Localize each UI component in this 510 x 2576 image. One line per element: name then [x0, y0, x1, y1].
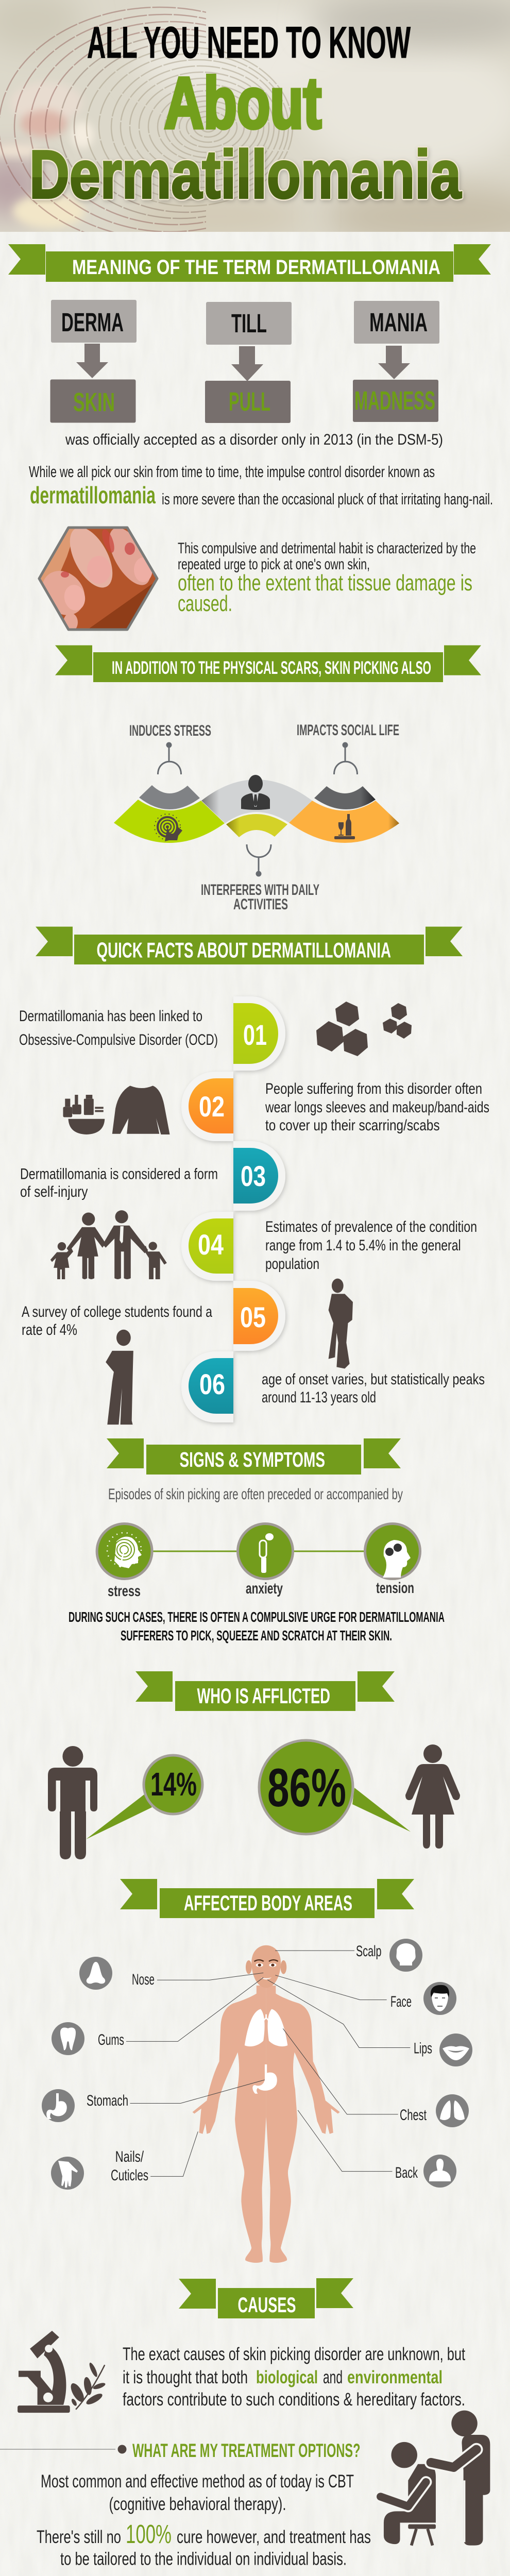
segment: social dark gray	[314, 786, 376, 809]
labels: body areas	[87, 1943, 432, 2184]
banner: who is afflicted: WHO IS AFFLICTED	[197, 1684, 330, 1708]
word root: derma to skin: SKIN	[73, 387, 115, 417]
icon: therapist and patient	[381, 2411, 490, 2546]
icon: male	[48, 1746, 97, 1859]
segment: stress gray	[139, 785, 200, 809]
callout: 86 percent: 86%	[267, 1758, 346, 1818]
icon: student with backpack	[329, 1279, 353, 1369]
icon: bust	[423, 2155, 456, 2188]
text: treatment options	[37, 2471, 371, 2569]
icon: stomach	[42, 2089, 75, 2122]
icon: face	[423, 1982, 456, 2015]
text: officially accepted: was officially accepted as a disorder only in 2013 (in the DSM-5)	[65, 431, 443, 448]
badge 04	[181, 1212, 233, 1281]
leader lines	[126, 1951, 410, 2176]
labels: body areas: Stomach	[87, 2092, 128, 2109]
icon: lips	[439, 2033, 472, 2066]
label: interferes with daily activities: ACTIVITIES	[233, 896, 288, 913]
connector: stress	[158, 743, 181, 774]
labels: body areas: Nose	[132, 1971, 155, 1988]
badge 01	[233, 996, 285, 1071]
fact 01: Dermatillomania has been linked to	[19, 1008, 202, 1025]
title line: about: About	[164, 62, 321, 143]
word root: mania to madness: MADNESS	[354, 386, 435, 415]
fact 03	[20, 1141, 285, 1211]
badge 01: 01	[243, 1019, 267, 1051]
labels: body areas: Scalp	[356, 1943, 381, 1960]
symptom: stress	[97, 1524, 152, 1579]
panel: gender split	[48, 1740, 460, 1859]
badge 05	[233, 1281, 285, 1351]
fact 04: population	[265, 1256, 319, 1273]
fact 01: Obsessive-Compulsive Disorder (OCD)	[19, 1031, 218, 1048]
fact 05: A survey of college students found a	[22, 1303, 212, 1320]
diagram: effects of skin picking	[114, 722, 399, 913]
panel: quick facts timeline	[19, 996, 489, 1425]
banner: affected body areas	[120, 1879, 414, 1918]
icon: female	[405, 1744, 460, 1849]
icon: scalp	[389, 1939, 422, 1972]
text: treatment options: Most common and effective method as of today is CBT	[41, 2471, 354, 2492]
word root: mania to madness	[353, 301, 439, 422]
banner: signs and symptoms: SIGNS & SYMPTOMS	[179, 1448, 325, 1471]
banner: quick facts	[36, 927, 463, 964]
word root: mania to madness: MANIA	[369, 308, 428, 337]
banner: causes: CAUSES	[238, 2293, 296, 2317]
text: treatment options: There's still no	[37, 2527, 121, 2547]
badge 03: 03	[241, 1160, 266, 1192]
word root: till to pull: TILL	[231, 309, 267, 338]
labels: body areas: Face	[390, 1993, 412, 2010]
label: stress: stress	[108, 1583, 141, 1600]
label: interferes with daily activities	[201, 882, 319, 913]
word root: till to pull	[205, 302, 292, 423]
connector: daily activities	[247, 844, 271, 876]
text: treatment options: 100%	[126, 2519, 172, 2549]
text: compulsive urge	[69, 1609, 445, 1643]
connector: social	[334, 743, 358, 774]
callout: 14 percent: 14%	[150, 1766, 197, 1803]
labels: body areas: Chest	[400, 2107, 427, 2124]
segment: stress green with head icon	[114, 800, 225, 843]
text: compulsive habit: repeated urge to pick at one's own skin,	[178, 556, 370, 573]
badge 06	[181, 1351, 233, 1422]
fact 05: rate of 4%	[22, 1321, 77, 1338]
banner: causes	[179, 2278, 353, 2318]
text: causes	[123, 2344, 465, 2410]
segment: social orange with bottle icon	[289, 801, 399, 843]
fact 03: Dermatillomania is considered a form	[20, 1165, 218, 1183]
icon: boy standing	[106, 1330, 133, 1425]
photo: picked fingers in hexagon	[38, 527, 159, 631]
fact 04	[50, 1210, 477, 1281]
labels: body areas: Nails/	[115, 2148, 144, 2165]
badge 02: 02	[199, 1090, 225, 1123]
banner: affected body areas: AFFECTED BODY AREAS	[184, 1891, 352, 1915]
fact 01	[19, 996, 412, 1071]
icon: makeup and sweater	[63, 1086, 170, 1134]
callout: 86 percent	[259, 1740, 411, 1834]
text: compulsive habit: caused.	[178, 591, 232, 616]
badge 03	[233, 1141, 285, 1211]
text: compulsive habit	[178, 540, 476, 616]
diagram: body figure	[126, 1945, 410, 2263]
icon: microscope and sprig	[18, 2331, 106, 2413]
badge 06: 06	[199, 1368, 225, 1400]
fact 05	[22, 1279, 353, 1369]
fact 02	[63, 1072, 489, 1141]
badge 05: 05	[240, 1301, 266, 1333]
icon: hand	[51, 2157, 84, 2190]
text: intro paragraph: dermatillomania	[30, 482, 156, 509]
label: impacts social life: IMPACTS SOCIAL LIFE	[297, 722, 399, 739]
badge 02	[181, 1072, 233, 1141]
panel: symptoms	[97, 1524, 420, 1600]
fact 03: of self-injury	[20, 1183, 88, 1200]
fingerprint	[0, 6, 293, 232]
symptom: anxiety	[238, 1524, 293, 1579]
banner: meaning of the term: MEANING OF THE TERM DERMATILLOMANIA	[72, 256, 440, 279]
banner: who is afflicted	[135, 1671, 395, 1711]
panel: word roots	[50, 300, 439, 423]
fact 06	[106, 1330, 485, 1425]
labels: body areas: Back	[395, 2164, 418, 2181]
text: treatment options: (cognitive behavioral therapy).	[109, 2494, 286, 2514]
fact 06: around 11-13 years old	[262, 1389, 376, 1406]
labels: body areas: Gums	[98, 2031, 124, 2048]
label: induces stress: INDUCES STRESS	[129, 722, 211, 739]
icon: nose	[79, 1957, 112, 1990]
text: causes: it is thought that both	[123, 2367, 248, 2387]
callout: 14 percent	[86, 1755, 202, 1839]
labels: body areas: Lips	[414, 2040, 432, 2057]
banner: in addition to the physical scars	[55, 645, 481, 682]
word root: till to pull: PULL	[229, 387, 270, 416]
symptom: tension	[365, 1524, 420, 1579]
label: anxiety: anxiety	[246, 1580, 283, 1597]
text: causes: biological	[256, 2367, 318, 2387]
segment: yellow	[226, 814, 287, 837]
text: treatment options: cure however, and treatment has	[177, 2527, 371, 2547]
banner: signs and symptoms	[107, 1438, 401, 1475]
text: treatment options: to be tailored to the individual on individual basis.	[60, 2549, 347, 2569]
icon: lungs	[436, 2094, 469, 2127]
label: tension: tension	[376, 1580, 414, 1597]
fact 02: to cover up their scarring/scabs	[265, 1117, 440, 1134]
icon: tooth	[52, 2022, 84, 2055]
heading: treatment options	[0, 2440, 361, 2461]
center segment with person	[201, 775, 312, 823]
badge 04: 04	[198, 1228, 224, 1261]
text: intro paragraph	[29, 463, 493, 509]
text: causes: and	[323, 2367, 343, 2387]
icon: family	[50, 1210, 167, 1279]
header panel	[0, 0, 510, 247]
word root: derma to skin: DERMA	[61, 308, 124, 337]
text: causes: environmental	[347, 2367, 443, 2387]
title	[29, 18, 462, 212]
heading: treatment options: WHAT ARE MY TREATMENT OPTIONS?	[132, 2440, 361, 2461]
label: interferes with daily activities: INTERFERES WITH DAILY	[201, 882, 319, 899]
labels: body areas: Cuticles	[111, 2167, 148, 2184]
icon: hexagon cells	[316, 1002, 412, 1056]
banner: meaning of the term	[8, 244, 491, 282]
word root: derma to skin	[50, 300, 137, 422]
